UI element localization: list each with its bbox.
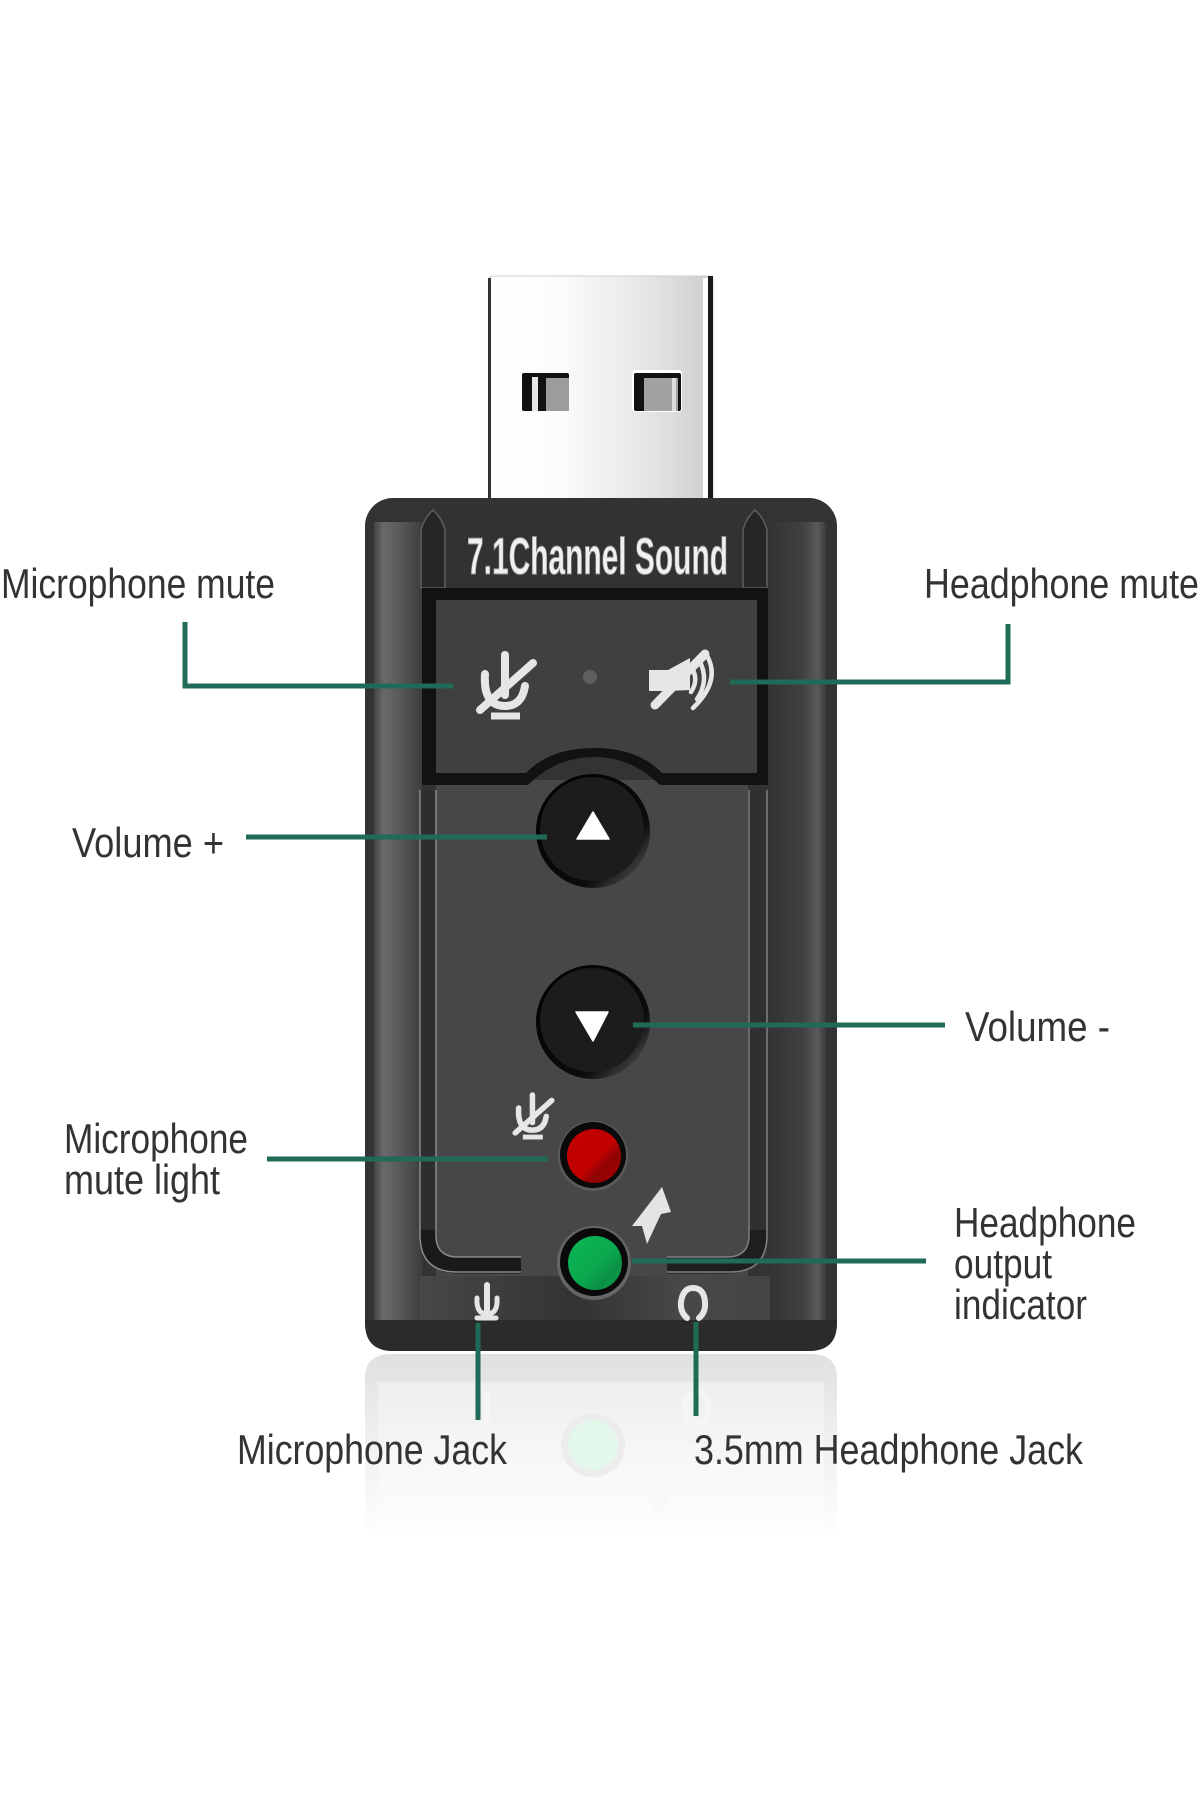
USB slot right — [632, 370, 682, 412]
lower panel — [420, 1276, 770, 1320]
text: Microphone mute: Microphone mute — [1, 560, 275, 607]
text: Microphone mute light: Microphone — [64, 1115, 248, 1162]
text: Volume plus: Volume + — [72, 819, 224, 866]
centre panel — [436, 780, 748, 1280]
leader: microphone mute — [185, 622, 453, 686]
text: Microphone mute light — [64, 1115, 248, 1203]
left side band — [374, 522, 422, 1320]
reflection of device — [365, 1354, 837, 1530]
right side band — [768, 522, 826, 1320]
leader: headphone output indicator — [632, 1258, 926, 1264]
USB slot left — [522, 373, 569, 411]
left groove — [420, 790, 521, 1272]
leader: volume plus — [246, 834, 547, 840]
text: Headphone output indicator: Headphone — [954, 1199, 1136, 1246]
indicator dot — [583, 670, 597, 684]
text: Volume minus: Volume - — [965, 1003, 1110, 1050]
text: Headphone output indicator: output — [954, 1240, 1052, 1287]
icon: lightning bolt — [632, 1187, 671, 1244]
button panel — [436, 600, 757, 773]
button: volume down — [536, 965, 650, 1079]
right groove — [667, 790, 767, 1272]
top strip — [430, 510, 760, 590]
USB plug — [488, 276, 713, 500]
text: 3.5mm Headphone Jack: 3.5mm Headphone Jack — [694, 1426, 1084, 1473]
button: volume up — [536, 774, 650, 888]
leader: headphone mute — [730, 624, 1008, 682]
button panel frame — [422, 588, 768, 785]
text: Headphone output indicator — [954, 1199, 1136, 1328]
leader: volume minus — [633, 1022, 945, 1028]
leader: microphone jack — [476, 1323, 480, 1420]
device body — [365, 498, 837, 1351]
text: Microphone mute light: mute light — [64, 1156, 220, 1203]
headphone output light — [557, 1226, 631, 1300]
microphone mute light — [558, 1121, 628, 1191]
top ridges — [421, 510, 767, 588]
label: 7.1 Channel Sound: 7.1Channel Sound — [467, 528, 728, 586]
icon: microphone jack — [477, 1285, 497, 1318]
icon: headphone jack — [681, 1288, 705, 1318]
text: Microphone Jack: Microphone Jack — [237, 1426, 508, 1473]
leader: headphone jack — [694, 1322, 698, 1416]
text: Headphone output indicator: indicator — [954, 1281, 1087, 1328]
icon: small microphone mute — [515, 1095, 552, 1137]
bottom lip — [365, 1320, 837, 1351]
icon: headphone mute speaker — [649, 654, 712, 708]
icon: microphone mute — [480, 655, 533, 716]
leader: microphone mute light — [267, 1156, 548, 1162]
